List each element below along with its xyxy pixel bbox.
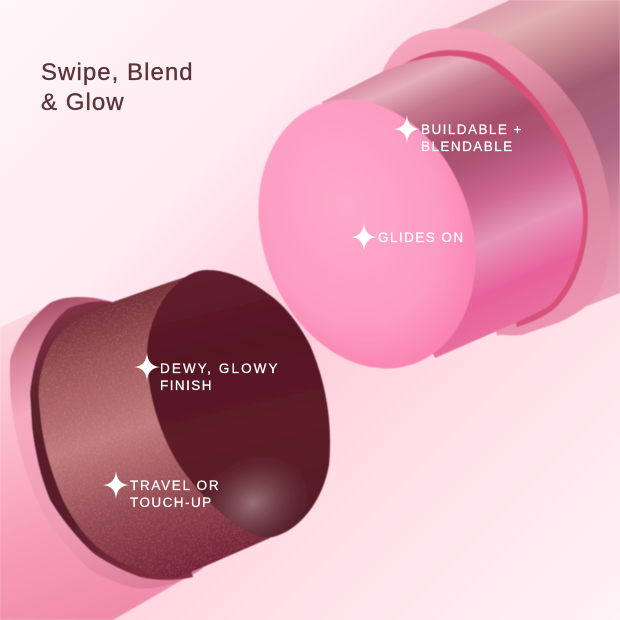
- berry inner sleeve: [39, 270, 270, 577]
- title: & Glow: [41, 89, 125, 116]
- berry collar ring: [10, 297, 203, 589]
- berry sleeve shimmer: [38, 278, 267, 576]
- callout: travel: [103, 471, 220, 510]
- balm collar ring: [382, 28, 610, 335]
- callout: buildable: BLENDABLE: [421, 139, 514, 154]
- balm cap body: [443, 0, 620, 336]
- callout: glides on: [351, 223, 465, 251]
- callout: dewy: [134, 353, 280, 393]
- callout: buildable: BUILDABLE +: [421, 122, 523, 137]
- balm face: [222, 69, 512, 399]
- icon: sparkle: [394, 115, 420, 143]
- icon: sparkle: [103, 471, 129, 499]
- icon: sparkle: [134, 353, 160, 381]
- callout: dewy: DEWY, GLOWY: [160, 361, 280, 376]
- balm inner sleeve: [322, 56, 583, 358]
- berry sheen: [208, 463, 300, 537]
- callout: dewy: FINISH: [160, 378, 213, 393]
- title: Swipe, Blend: [41, 59, 194, 86]
- callout: buildable: [394, 115, 523, 154]
- product: berry balm stick: [0, 265, 330, 620]
- icon: sparkle: [351, 223, 377, 251]
- product: pink balm stick: [222, 0, 620, 399]
- berry face: [147, 270, 330, 538]
- callout: travel: TOUCH-UP: [130, 495, 213, 510]
- callout: glides on: GLIDES ON: [378, 230, 465, 245]
- callout: travel: TRAVEL OR: [130, 478, 220, 493]
- berry cap body: [0, 300, 203, 620]
- berry inner rim: [30, 301, 193, 580]
- balm inner rim: [404, 50, 588, 327]
- title: [41, 59, 194, 116]
